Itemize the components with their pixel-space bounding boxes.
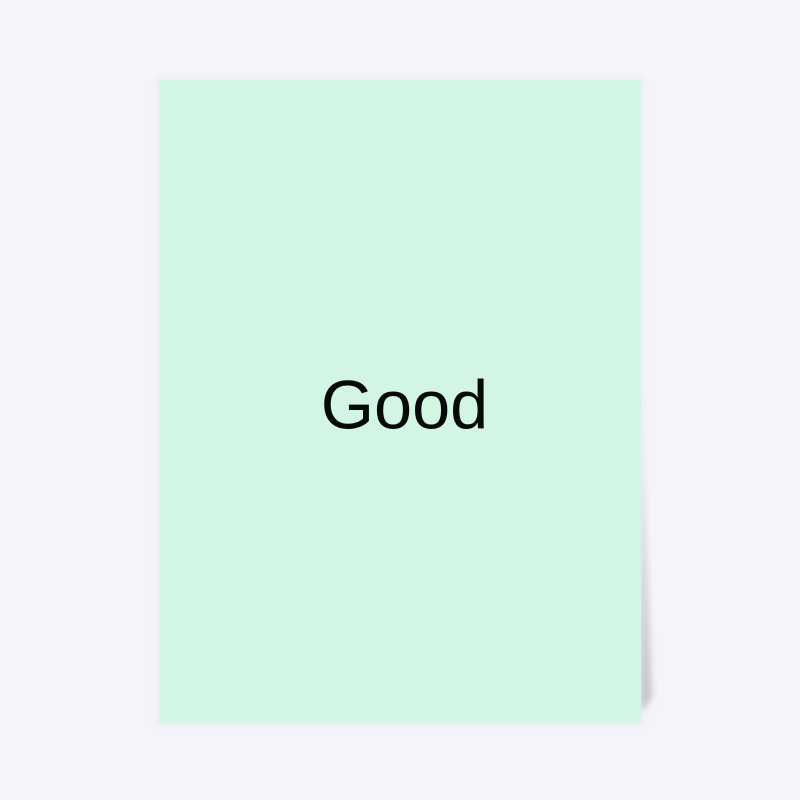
poster word: Good: Good [321, 366, 488, 444]
poster shadow [155, 76, 652, 728]
